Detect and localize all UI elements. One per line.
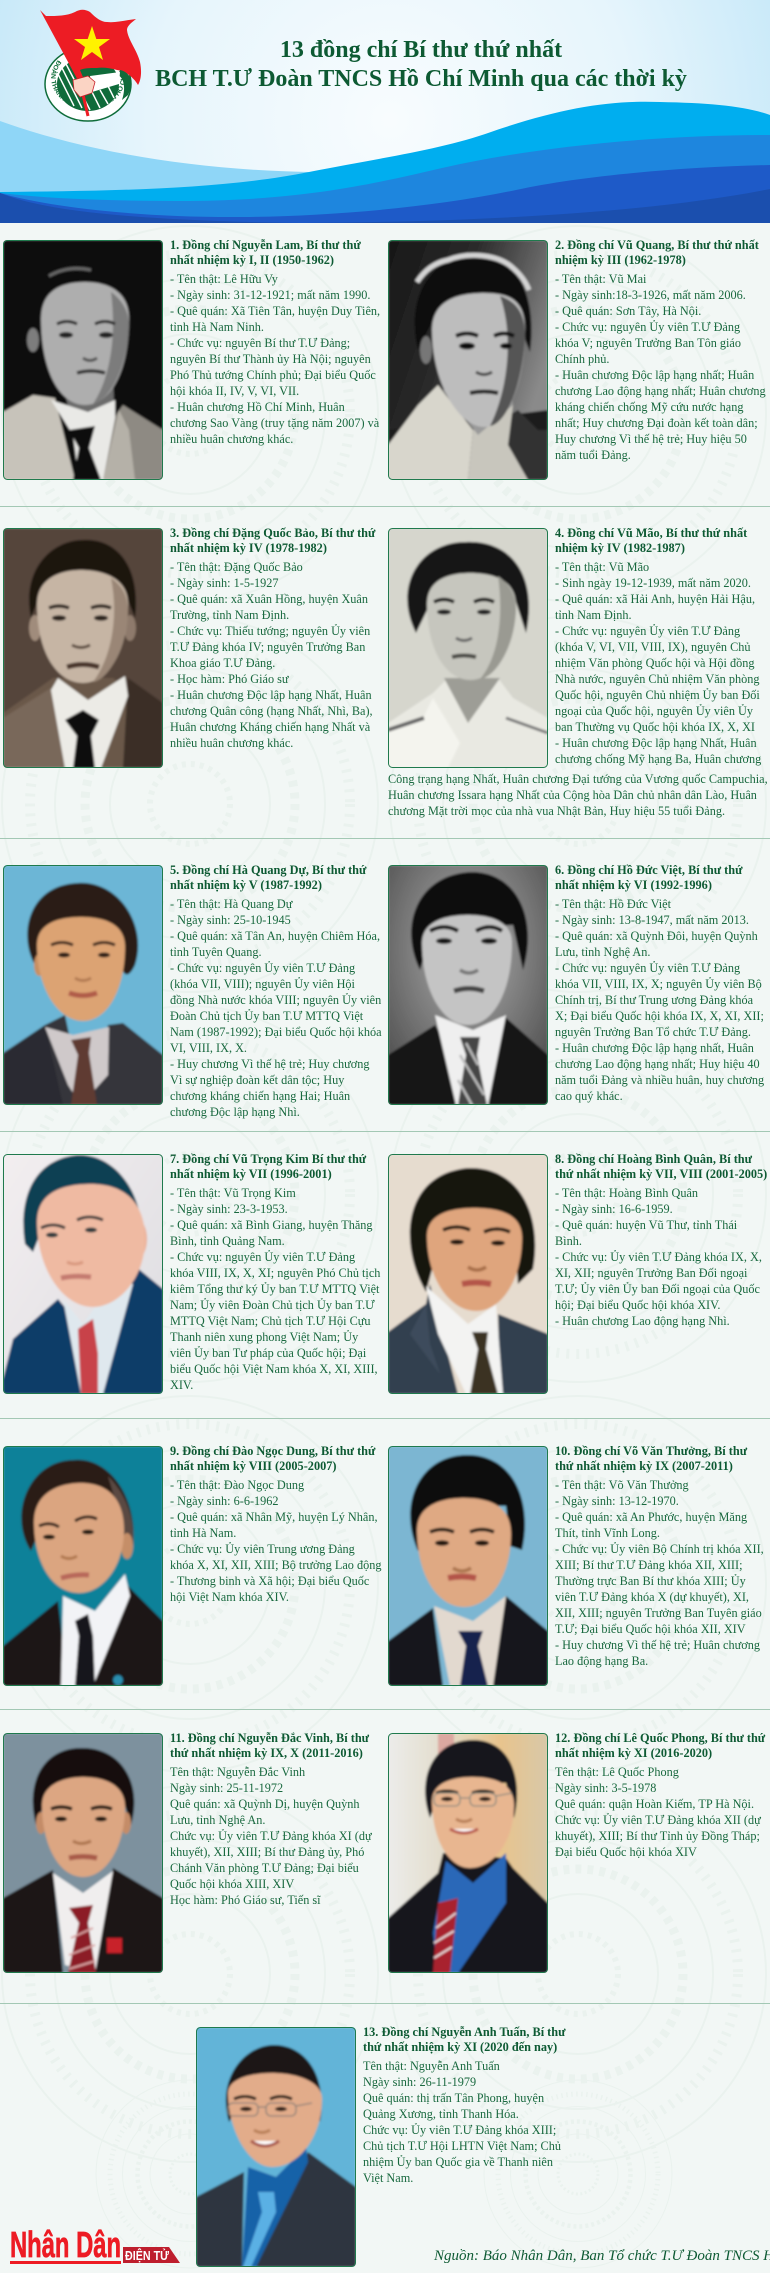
biography: tỉnh Hà Nam.	[170, 1526, 236, 1540]
heading: nhiệm kỳ IV (1982-1987)	[555, 541, 685, 555]
biography: chương Lao động hạng nhất; Huy hiệu 40	[555, 1057, 760, 1071]
biography: hội khóa II, IV, V, VI, VII.	[170, 384, 299, 398]
logo: Đoàn TNCS emblem	[40, 10, 142, 122]
biography: - Chức vụ: nguyên Ủy viên T.Ư Đảng	[170, 961, 355, 975]
biography: khóa V; nguyên Trưởng Ban Tôn giáo	[555, 336, 741, 350]
heading	[555, 863, 743, 892]
heading: 5. Đồng chí Hà Quang Dự, Bí thư thứ	[170, 863, 366, 877]
biography	[555, 897, 764, 1103]
biography: T.Ư; Ủy viên Ủy ban Đối ngoại của Quốc	[555, 1282, 760, 1296]
biography: - Quê quán: xã Tân An, huyện Chiêm Hóa,	[170, 929, 380, 943]
biography: T.Ư; Đại biểu Quốc hội khóa XII, XIV	[555, 1622, 746, 1636]
biography: chương chống Mỹ hạng Ba, Huân chương	[555, 752, 761, 766]
biography: ban Thường vụ Quốc hội khóa IX, X, XI	[555, 720, 755, 734]
panel: 4 Vũ Mão	[388, 526, 768, 818]
biography: - Tên thật: Đào Ngọc Dung	[170, 1478, 304, 1492]
heading: nhất nhiệm kỳ VI (1992-1996)	[555, 878, 712, 892]
panel: 8 Hoàng Bình Quân	[388, 1152, 767, 1394]
biography: đồng Nhà nước khóa VIII; nguyên Ủy viên	[170, 993, 381, 1007]
biography: chương Độc lập hạng Nhì.	[170, 1105, 300, 1119]
biography: khuyết), XII, XIII; Bí thư Đảng ủy, Phó	[170, 1845, 364, 1859]
biography: - Ngày sinh: 6-6-1962	[170, 1494, 279, 1508]
biography: - Chức vụ: Ủy viên Bộ Chính trị khóa XII,	[555, 1542, 764, 1556]
panel: 11 Nguyễn Đắc Vinh	[3, 1731, 372, 1973]
biography: - Chức vụ: nguyên Ủy viên T.Ư Đảng	[555, 320, 740, 334]
biography: Bình.	[555, 1234, 582, 1248]
heading: nhất nhiệm kỳ IV (1978-1982)	[170, 541, 327, 555]
heading: thứ nhất nhiệm kỳ IX, X (2011-2016)	[170, 1746, 363, 1760]
portrait: Vũ Quang	[388, 240, 548, 480]
biography: - Tên thật: Đặng Quốc Bảo	[170, 560, 303, 574]
biography: - Chức vụ: nguyên Ủy viên T.Ư Đảng	[170, 1250, 355, 1264]
biography: - Huân chương Độc lập hạng Nhất, Huân	[170, 688, 372, 702]
portrait: Hoàng Bình Quân	[388, 1154, 548, 1394]
biography: XIV.	[170, 1378, 193, 1392]
heading: 10. Đồng chí Võ Văn Thưởng, Bí thư	[555, 1444, 747, 1458]
biography: Quê quán: quận Hoàn Kiếm, TP Hà Nội.	[555, 1797, 754, 1811]
biography: tỉnh Nam Định.	[555, 608, 632, 622]
biography: năm tuổi Đảng và nhiều huân, huy chương	[555, 1073, 764, 1087]
heading	[555, 238, 759, 267]
biography: chương kháng chiến hạng Hai; Huân	[170, 1089, 350, 1103]
biography: Chức vụ: Ủy viên T.Ư Đảng khóa XIII;	[363, 2123, 556, 2137]
biography: - Quê quán: xã An Phước, huyện Măng	[555, 1510, 747, 1524]
biography: Nam; Ủy viên Đoàn Chủ tịch Ủy ban T.Ư	[170, 1298, 375, 1312]
heading: nhất nhiệm kỳ VIII (2005-2007)	[170, 1459, 336, 1473]
biography: Huân chương Kháng chiến hạng Nhất và	[170, 720, 370, 734]
title: BCH T.Ư Đoàn TNCS Hồ Chí Minh qua các thời kỳ	[155, 66, 687, 92]
biography: Thường trực Ban Bí thư khóa XIII; Ủy	[555, 1574, 746, 1588]
biography	[363, 2059, 561, 2185]
heading	[555, 526, 748, 555]
biography: - Ngày sinh: 23-3-1953.	[170, 1202, 288, 1216]
biography: Huy chương Vì thế hệ trẻ; Huy hiệu 50	[555, 432, 747, 446]
biography: nguyên Trưởng Ban Tổ chức T.Ư Đảng.	[555, 1025, 751, 1039]
portrait: Nguyễn Anh Tuấn	[196, 2027, 356, 2267]
panel: 5 Hà Quang Dự	[3, 863, 382, 1119]
heading	[170, 238, 361, 267]
biography: Học hàm: Phó Giáo sư, Tiến sĩ	[170, 1893, 321, 1907]
portrait: Hồ Đức Việt	[388, 865, 548, 1105]
biography: cao quý khác.	[555, 1089, 623, 1103]
biography: Nam (1987-1992); Đại biểu Quốc hội khóa	[170, 1025, 382, 1039]
panel: 12 Lê Quốc Phong	[388, 1731, 766, 1973]
biography: Lưu, tỉnh Nghệ An.	[555, 945, 650, 959]
biography: Tên thật: Nguyễn Đắc Vinh	[170, 1765, 305, 1779]
biography: Thít, tỉnh Vĩnh Long.	[555, 1526, 660, 1540]
biography: Thanh niên xung phong Việt Nam; Ủy	[170, 1330, 358, 1344]
biography: - Quê quán: xã Quỳnh Đôi, huyện Quỳnh	[555, 929, 758, 943]
biography: - Thương binh và Xã hội; Đại biểu Quốc	[170, 1574, 369, 1588]
biography: hội Việt Nam khóa XIV.	[170, 1590, 289, 1604]
header banner with waves	[0, 0, 770, 223]
biography: Vì sự nghiệp đoàn kết dân tộc; Huy	[170, 1073, 344, 1087]
biography: Đại biểu Quốc hội khóa XIV	[555, 1845, 697, 1859]
heading	[170, 526, 376, 555]
biography: T.Ư Đảng khóa IV; nguyên Trưởng Ban	[170, 640, 365, 654]
heading: nhất nhiệm kỳ V (1987-1992)	[170, 878, 322, 892]
biography: Chủ tịch T.Ư Hội LHTN Việt Nam; Chủ	[363, 2139, 561, 2153]
biography	[555, 1186, 762, 1328]
heading: 13. Đồng chí Nguyễn Anh Tuấn, Bí thư	[363, 2025, 566, 2039]
biography: (khóa VII, VIII); nguyên Ủy viên Hội	[170, 977, 355, 991]
biography: năm tuổi Đảng.	[555, 448, 631, 462]
biography: MTTQ Việt Nam; Chủ tịch T.Ư Hội Cựu	[170, 1314, 371, 1328]
biography: - Tên thật: Lê Hữu Vy	[170, 272, 278, 286]
heading	[363, 2025, 566, 2054]
heading: thứ nhất nhiệm kỳ IX (2007-2011)	[555, 1459, 733, 1473]
biography	[170, 560, 373, 750]
heading	[170, 863, 366, 892]
portrait: Vũ Trọng Kim	[3, 1154, 163, 1394]
biography: - Chức vụ: nguyên Ủy viên T.Ư Đảng	[555, 624, 740, 638]
biography: chương Sao Vàng (truy tặng năm 2007) và	[170, 416, 379, 430]
panel: 2 Vũ Quang	[388, 238, 766, 480]
biography: viên T.Ư Đảng khóa X (dự khuyết), XI,	[555, 1590, 749, 1604]
panel: 1 Nguyễn Lam	[3, 238, 380, 480]
biography: Bình, tỉnh Quảng Nam.	[170, 1234, 285, 1248]
biography: Chức vụ: Ủy viên T.Ư Đảng khóa XI (dự	[170, 1829, 372, 1843]
heading: 3. Đồng chí Đặng Quốc Bảo, Bí thư thứ	[170, 526, 375, 540]
biography: - Quê quán: Xã Tiên Tân, huyện Duy Tiên,	[170, 304, 380, 318]
portrait: Nguyễn Đắc Vinh	[3, 1733, 163, 1973]
biography: biểu Quốc hội Việt Nam khóa X, XI, XIII,	[170, 1362, 378, 1376]
biography: khóa X, XI, XII, XIII; Bộ trưởng Lao động	[170, 1558, 381, 1572]
heading: nhất nhiệm kỳ I, II (1950-1962)	[170, 253, 334, 267]
biography: Quốc hội khóa XIII, XIV	[170, 1877, 294, 1891]
biography: - Quê quán: xã Bình Giang, huyện Thăng	[170, 1218, 373, 1232]
panel: 3 Đặng Quốc Bảo	[3, 526, 376, 768]
heading: thứ nhất nhiệm kỳ XI (2020 đến nay)	[363, 2040, 557, 2054]
heading: thứ nhất nhiệm kỳ VII, VIII (2001-2005)	[555, 1167, 767, 1181]
biography: Quê quán: xã Quỳnh Dị, huyện Quỳnh	[170, 1797, 360, 1811]
biography: - Chức vụ: Thiếu tướng; nguyên Ủy viên	[170, 624, 370, 638]
biography	[170, 1186, 380, 1392]
biography: Trường, tỉnh Nam Định.	[170, 608, 289, 622]
biography: Tên thật: Nguyễn Anh Tuấn	[363, 2059, 500, 2073]
biography: kháng chiến chống Mỹ cứu nước hạng	[555, 400, 744, 414]
biography: XII, XIII; nguyên Trưởng Ban Tuyên giáo	[555, 1606, 762, 1620]
portrait: Hà Quang Dự	[3, 865, 163, 1105]
heading: 7. Đồng chí Vũ Trọng Kim Bí thư thứ	[170, 1152, 366, 1166]
biography: - Tên thật: Hồ Đức Việt	[555, 897, 671, 911]
portrait: Đào Ngọc Dung	[3, 1446, 163, 1686]
biography: - Ngày sinh:18-3-1926, mất năm 2006.	[555, 288, 746, 302]
biography: nhiệm Văn phòng Quốc hội và Hội đồng	[555, 656, 754, 670]
biography: - Sinh ngày 19-12-1939, mất năm 2020.	[555, 576, 751, 590]
biography: VI, VIII, IX, X.	[170, 1041, 247, 1055]
portrait: Vũ Mão	[388, 528, 548, 768]
biography: - Ngày sinh: 1-5-1927	[170, 576, 279, 590]
biography: - Học hàm: Phó Giáo sư	[170, 672, 289, 686]
biography: - Quê quán: xã Nhân Mỹ, huyện Lý Nhân,	[170, 1510, 378, 1524]
biography: Ngày sinh: 3-5-1978	[555, 1781, 656, 1795]
biography: - Chức vụ: nguyên Bí thư T.Ư Đảng;	[170, 336, 350, 350]
biography: Nhà nước, nguyên Chủ nhiệm Văn phòng	[555, 672, 759, 686]
biography: chương Lao động hạng nhất; Huân chương	[555, 384, 766, 398]
portrait: Đặng Quốc Bảo	[3, 528, 163, 768]
heading	[170, 1731, 370, 1760]
biography: - Chức vụ: Ủy viên Trung ương Đảng	[170, 1542, 355, 1556]
biography: Lao động hạng Ba.	[555, 1654, 648, 1668]
portrait: Nguyễn Lam	[3, 240, 163, 480]
heading	[170, 1152, 366, 1181]
biography: - Tên thật: Hoàng Bình Quân	[555, 1186, 698, 1200]
biography: Chức vụ: Ủy viên T.Ư Đảng khóa XII (dự	[555, 1813, 761, 1827]
heading	[555, 1152, 767, 1181]
heading: nhất nhiệm kỳ XI (2016-2020)	[555, 1746, 712, 1760]
biography continuation: Huân chương Issara hạng Nhất của Cộng hòa Dân chủ nhân dân Lào, Huân	[388, 788, 757, 802]
panel: 7 Vũ Trọng Kim	[3, 1152, 380, 1394]
biography: nhất; Huy chương Đại đoàn kết toàn dân;	[555, 416, 758, 430]
portrait: Võ Văn Thưởng	[388, 1446, 548, 1686]
biography: - Tên thật: Hà Quang Dự	[170, 897, 292, 911]
heading: 4. Đồng chí Vũ Mão, Bí thư thứ nhất	[555, 526, 747, 540]
biography	[170, 1478, 382, 1604]
biography: - Chức vụ: Ủy viên T.Ư Đảng khóa IX, X,	[555, 1250, 762, 1264]
biography: Phó Thủ tướng Chính phủ; Đại biểu Quốc	[170, 368, 376, 382]
panel: 13 Nguyễn Anh Tuấn	[196, 2025, 566, 2267]
logo: Nhân Dân điện tử: ĐIỆN TỬ	[125, 2248, 170, 2263]
biography: - Ngày sinh: 31-12-1921; mất năm 1990.	[170, 288, 370, 302]
logo: Nhân Dân điện tử: Nhân Dân	[10, 2225, 121, 2265]
biography: nhiều huân chương khác.	[170, 432, 293, 446]
panel: 6 Hồ Đức Việt	[388, 863, 764, 1105]
biography: X; Đại biểu Quốc hội khóa IX, X, XI, XII;	[555, 1009, 764, 1023]
biography: - Huân chương Độc lập hạng Nhất, Huân	[555, 736, 757, 750]
biography: khuyết), XIII; Bí thư Tỉnh ủy Đồng Tháp;	[555, 1829, 760, 1843]
biography: - Tên thật: Vũ Mão	[555, 560, 649, 574]
biography: XI, XII; nguyên Trưởng Ban Đối ngoại	[555, 1266, 747, 1280]
panel: 10 Võ Văn Thưởng	[388, 1444, 764, 1686]
biography: Quảng Xương, tỉnh Thanh Hóa.	[363, 2107, 519, 2121]
biography: nhiệm Ủy ban Quốc gia về Thanh niên	[363, 2155, 553, 2169]
biography: Đoàn Chủ tịch Ủy ban T.Ư MTTQ Việt	[170, 1009, 363, 1023]
biography: - Chức vụ: nguyên Ủy viên T.Ư Đảng	[555, 961, 740, 975]
heading: 2. Đồng chí Vũ Quang, Bí thư thứ nhất	[555, 238, 759, 252]
heading: nhiệm kỳ III (1962-1978)	[555, 253, 686, 267]
biography continuation	[388, 772, 768, 818]
biography: tỉnh Tuyên Quang.	[170, 945, 262, 959]
biography	[555, 560, 761, 766]
biography: - Ngày sinh: 25-10-1945	[170, 913, 291, 927]
biography continuation: Công trạng hạng Nhất, Huân chương Đại tướng của Vương quốc Campuchia,	[388, 772, 768, 786]
biography: - Tên thật: Vũ Mai	[555, 272, 646, 286]
heading: 12. Đồng chí Lê Quốc Phong, Bí thư thứ	[555, 1731, 765, 1745]
biography: Tên thật: Lê Quốc Phong	[555, 1765, 679, 1779]
heading	[555, 1731, 766, 1760]
biography: Ngày sinh: 25-11-1972	[170, 1781, 283, 1795]
biography continuation: chương Mặt trời mọc của nhà vua Nhật Bản, Huy hiệu 55 tuổi Đảng.	[388, 804, 725, 818]
biography: - Quê quán: xã Xuân Hồng, huyện Xuân	[170, 592, 368, 606]
biography	[170, 897, 382, 1119]
biography: nhiều huân chương khác.	[170, 736, 293, 750]
biography: viên Ủy ban Tư pháp của Quốc hội; Đại	[170, 1346, 366, 1360]
biography: Chính phủ.	[555, 352, 609, 366]
biography: - Tên thật: Võ Văn Thưởng	[555, 1478, 689, 1492]
biography: XIII; Bí thư T.Ư Đảng khóa XII, XIII;	[555, 1558, 742, 1572]
title	[155, 37, 687, 92]
heading: 8. Đồng chí Hoàng Bình Quân, Bí thư	[555, 1152, 752, 1166]
biography: - Quê quán: huyện Vũ Thư, tỉnh Thái	[555, 1218, 737, 1232]
biography: - Huân chương Độc lập hạng nhất; Huân	[555, 368, 754, 382]
biography: - Quê quán: xã Hải Anh, huyện Hải Hậu,	[555, 592, 755, 606]
biography: Quê quán: thị trấn Tân Phong, huyện	[363, 2091, 544, 2105]
heading: 11. Đồng chí Nguyễn Đắc Vinh, Bí thư	[170, 1731, 369, 1745]
biography: - Ngày sinh: 13-12-1970.	[555, 1494, 679, 1508]
panel: 9 Đào Ngọc Dung	[3, 1444, 382, 1686]
biography	[170, 272, 380, 446]
biography: - Ngày sinh: 13-8-1947, mất năm 2013.	[555, 913, 749, 927]
biography: chương Quân công (hạng Nhất, Nhì, Ba),	[170, 704, 373, 718]
biography: - Huân chương Hồ Chí Minh, Huân	[170, 400, 345, 414]
heading: nhất nhiệm kỳ VII (1996-2001)	[170, 1167, 332, 1181]
biography: hội; Đại biểu Quốc hội khóa XIV.	[555, 1298, 720, 1312]
biography: Lưu, tỉnh Nghệ An.	[170, 1813, 265, 1827]
biography: - Tên thật: Vũ Trọng Kim	[170, 1186, 296, 1200]
biography: kiêm Tổng thư ký Ủy ban T.Ư MTTQ Việt	[170, 1282, 379, 1296]
biography	[555, 1765, 762, 1859]
biography: - Huy chương Vì thế hệ trẻ; Huân chương	[555, 1638, 760, 1652]
biography	[555, 1478, 764, 1668]
biography: - Huân chương Lao động hạng Nhì.	[555, 1314, 730, 1328]
biography: - Quê quán: Sơn Tây, Hà Nội.	[555, 304, 701, 318]
biography: Chính trị, Bí thư Trung ương Đảng khóa	[555, 993, 753, 1007]
biography: Ngày sinh: 26-11-1979	[363, 2075, 476, 2089]
biography	[170, 1765, 372, 1907]
biography: Quốc hội, nguyên Chủ nhiệm Ủy ban Đối	[555, 688, 760, 702]
portrait: Lê Quốc Phong	[388, 1733, 548, 1973]
heading: 9. Đồng chí Đào Ngọc Dung, Bí thư thứ	[170, 1444, 375, 1458]
biography: khóa VII, VIII, IX, X; nguyên Ủy viên Bộ	[555, 977, 762, 991]
biography	[555, 272, 766, 462]
biography: ngoại của Quốc hội, nguyên Ủy viên Ủy	[555, 704, 753, 718]
heading: 6. Đồng chí Hồ Đức Việt, Bí thư thứ	[555, 863, 742, 877]
title: 13 đồng chí Bí thư thứ nhất	[280, 37, 562, 63]
biography: (khóa V, VI, VII, VIII, IX), nguyên Chủ	[555, 640, 751, 654]
biography: nguyên Bí thư Thành ủy Hà Nội; nguyên	[170, 352, 371, 366]
biography: - Huy chương Vì thế hệ trẻ; Huy chương	[170, 1057, 370, 1071]
heading: 1. Đồng chí Nguyễn Lam, Bí thư thứ	[170, 238, 361, 252]
biography: khóa VIII, IX, X, XI; nguyên Phó Chủ tịch	[170, 1266, 380, 1280]
biography: Việt Nam.	[363, 2171, 413, 2185]
biography: tỉnh Hà Nam Ninh.	[170, 320, 264, 334]
biography: Khoa giáo T.Ư Đảng.	[170, 656, 275, 670]
heading	[170, 1444, 376, 1473]
biography: - Huân chương Độc lập hạng nhất, Huân	[555, 1041, 754, 1055]
biography: Chánh Văn phòng T.Ư Đảng; Đại biểu	[170, 1861, 359, 1875]
heading	[555, 1444, 748, 1473]
biography: - Ngày sinh: 16-6-1959.	[555, 1202, 673, 1216]
